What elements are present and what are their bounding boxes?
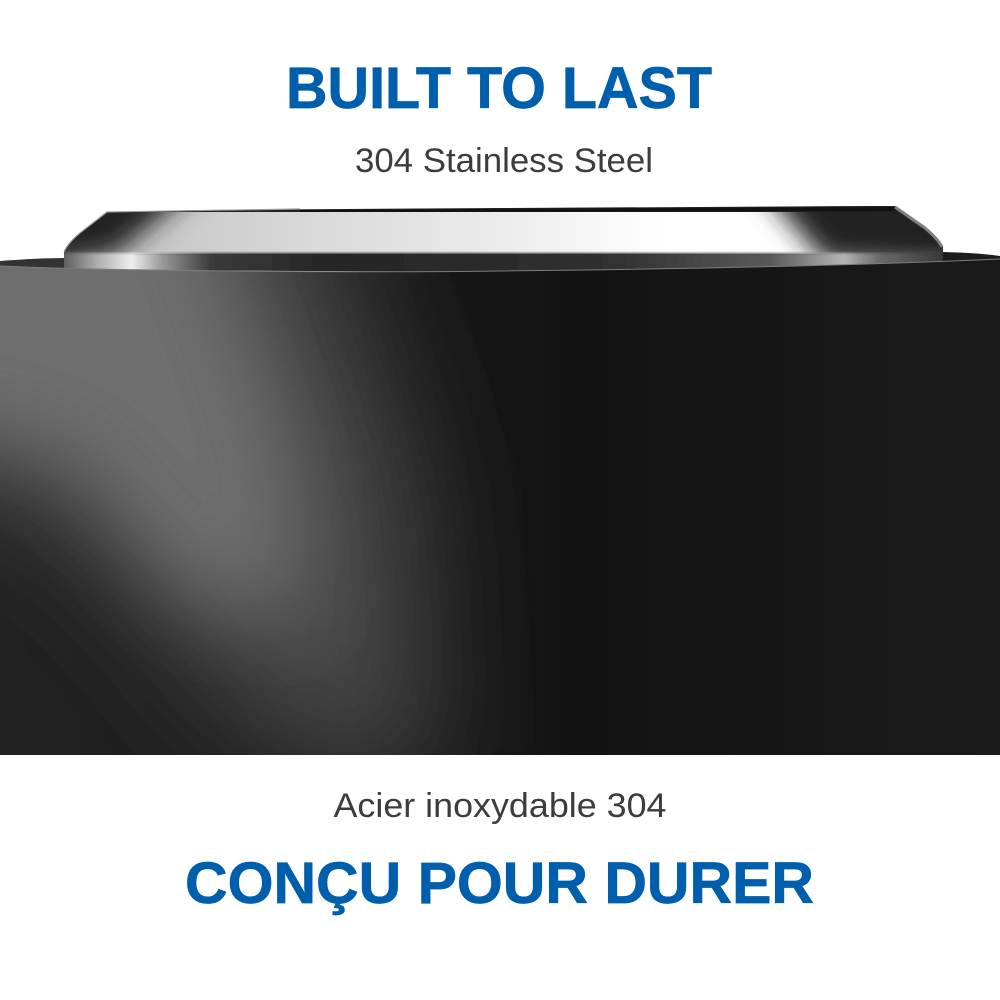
- title: BUILT TO LAST: BUILT TO LAST: [286, 56, 712, 121]
- french subtitle: Acier inoxydable 304: Acier inoxydable 304: [334, 787, 666, 825]
- subtitle: 304 Stainless Steel: 304 Stainless Steel: [355, 142, 653, 180]
- french title: CONÇU POUR DURER: CONÇU POUR DURER: [185, 851, 814, 916]
- stainless steel lid: [0, 206, 1000, 272]
- black bowl body: [0, 258, 1000, 755]
